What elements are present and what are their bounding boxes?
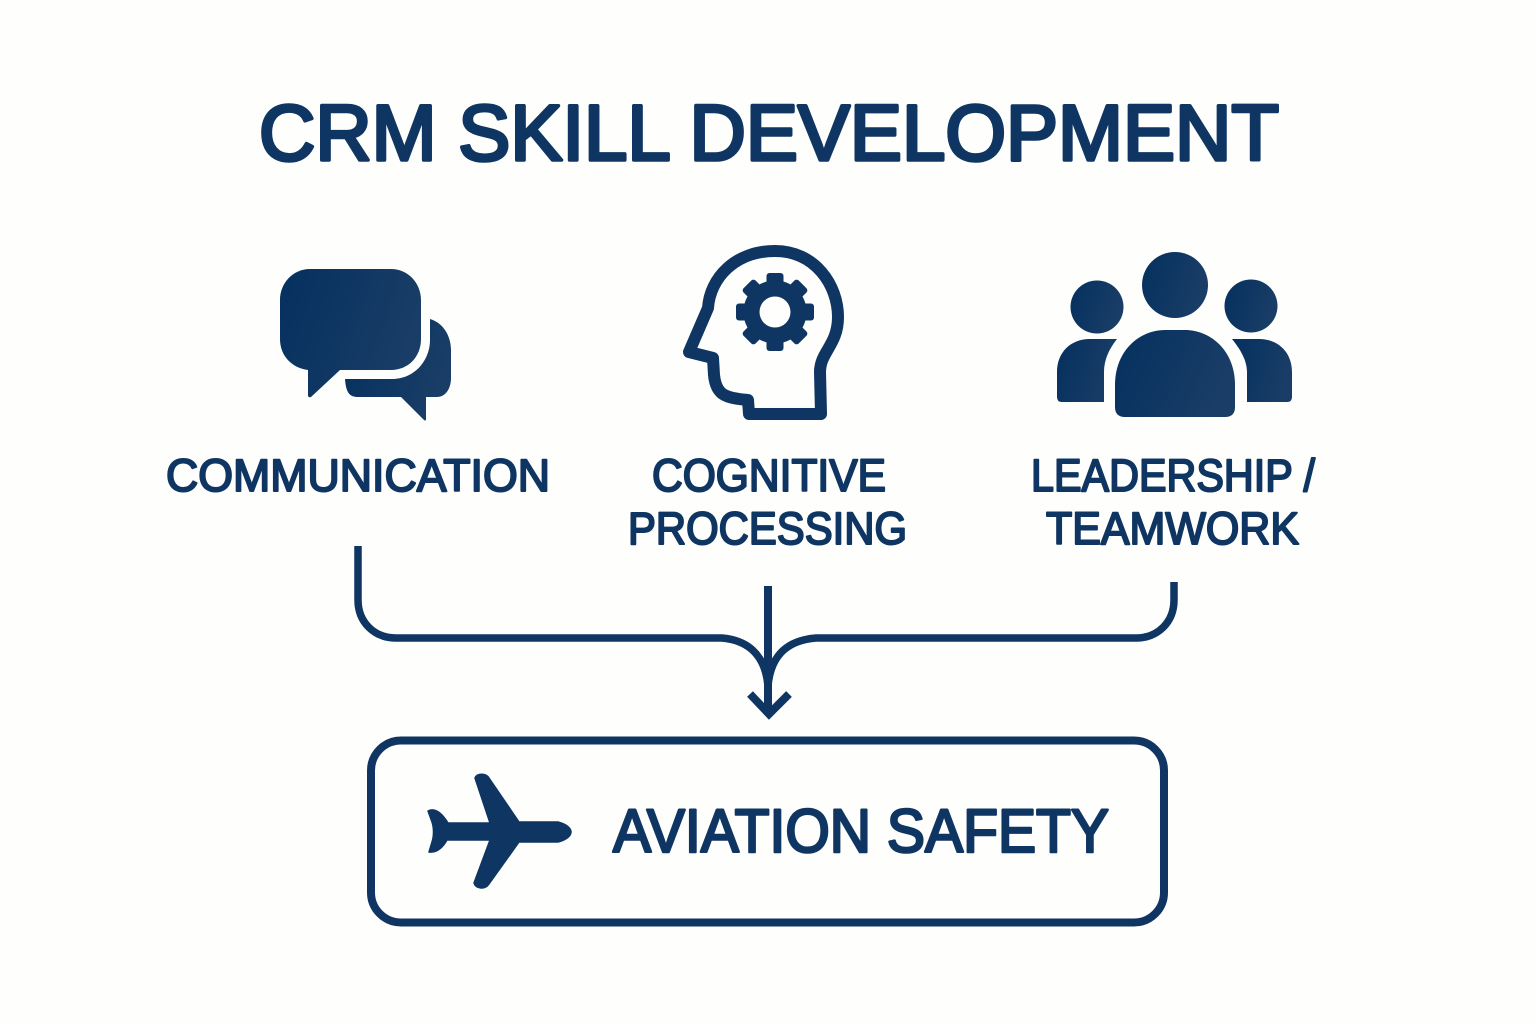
title: CRM SKILL DEVELOPMENT [259, 88, 1279, 177]
label: leadership / teamwork: TEAMWORK [1046, 503, 1299, 554]
outcome box [371, 740, 1164, 922]
arrow: merging connectors [358, 546, 1174, 714]
panel: leadership / teamwork [1031, 252, 1315, 554]
label: leadership / teamwork [1031, 450, 1315, 554]
panel: cognitive processing [628, 251, 907, 554]
label: leadership / teamwork: LEADERSHIP / [1031, 450, 1315, 501]
icon: group of people [1057, 252, 1292, 417]
panel: aviation safety [371, 740, 1164, 922]
label: cognitive processing: COGNITIVE [652, 450, 886, 501]
label: communication: COMMUNICATION [166, 450, 550, 501]
icon: speech bubbles [280, 269, 451, 420]
icon: head with gear [689, 251, 838, 414]
label: aviation safety: AVIATION SAFETY [613, 797, 1109, 865]
label: cognitive processing: PROCESSING [628, 503, 907, 554]
panel: communication [166, 269, 550, 501]
label: cognitive processing [628, 450, 907, 554]
icon: airplane [428, 774, 571, 888]
